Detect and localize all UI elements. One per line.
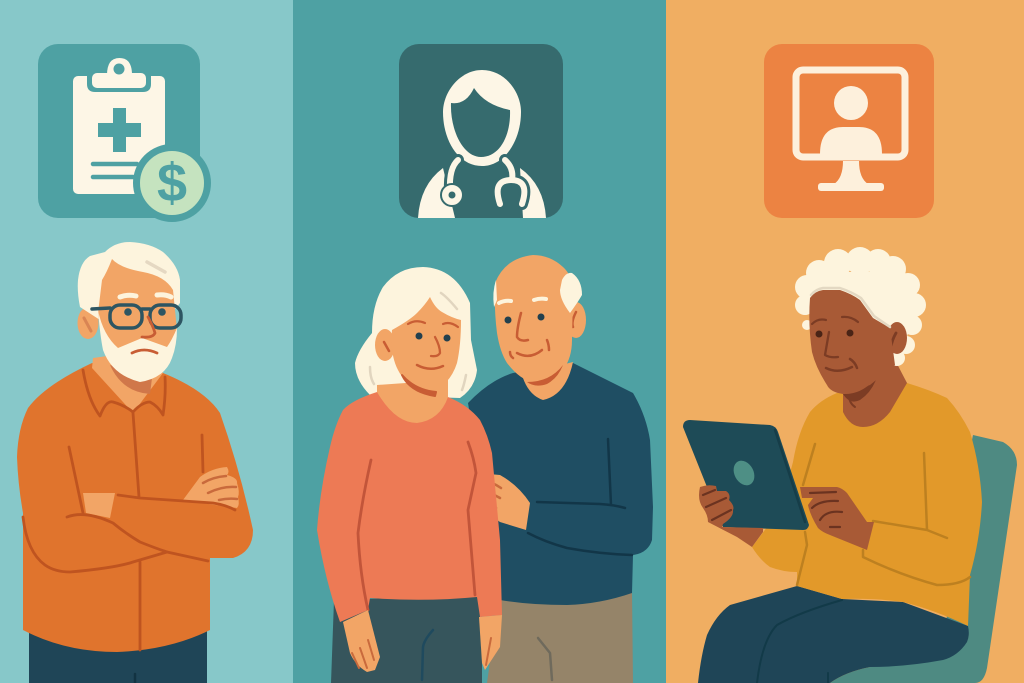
figure: older man in navy sweater	[468, 255, 653, 683]
figure: older woman in coral sweater	[317, 267, 502, 683]
figure: older woman using tablet	[683, 247, 982, 683]
panel: middle background	[293, 0, 666, 683]
panel: left background	[0, 0, 293, 683]
icon: clipboard with medical cross and dollar coin: $	[157, 153, 187, 213]
icon: clipboard with medical cross and dollar coin	[38, 44, 208, 218]
icon: video call monitor	[764, 44, 934, 218]
icon: doctor with stethoscope	[399, 44, 563, 218]
figure: skeptical older man with glasses and crossed arms	[17, 242, 253, 683]
figure: teal chair	[830, 435, 1017, 683]
panel: right background	[666, 0, 1024, 683]
